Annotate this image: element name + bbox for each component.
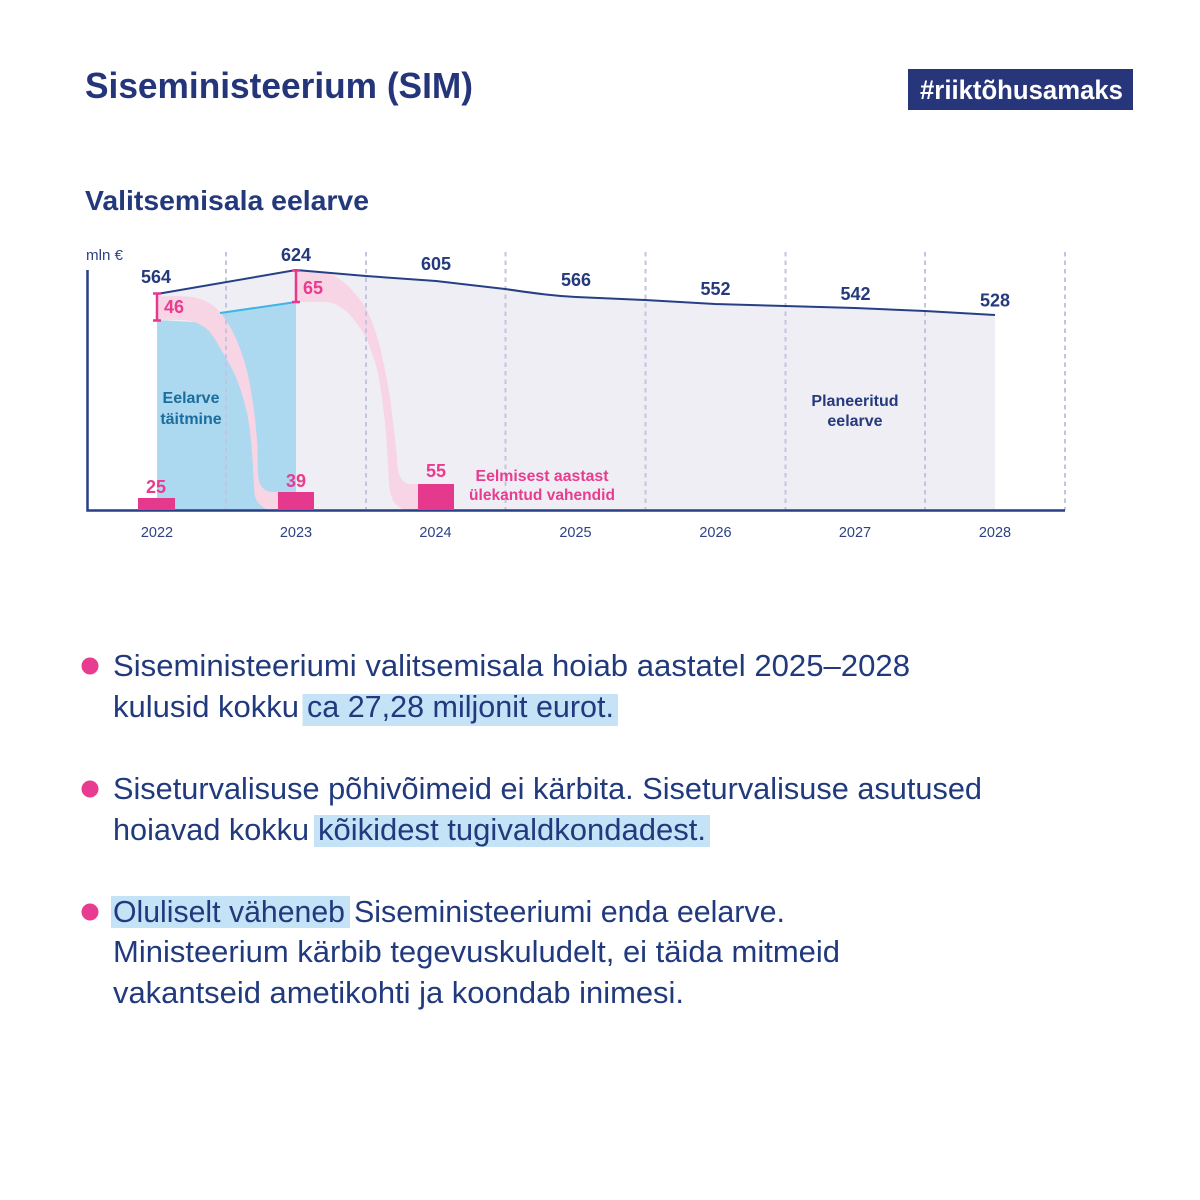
bullet point 1: ca 27,28 miljonit eurot.: [307, 689, 614, 724]
carried over values: 65: [303, 278, 323, 298]
bullet point 1: Siseministeeriumi valitsemisala hoiab aastatel 2025–2028: [113, 648, 910, 683]
carried over values: 46: [164, 297, 184, 317]
carried over values: [146, 278, 446, 497]
total values: 605: [421, 254, 451, 274]
range markers: [153, 270, 300, 320]
hashtag badge: [908, 69, 1133, 110]
axis unit: mln €: [86, 248, 123, 264]
total values: 552: [700, 279, 731, 299]
total values: 564: [141, 267, 171, 287]
total values: 566: [561, 270, 591, 290]
label: carried over funds: ülekantud vahendid: [469, 487, 615, 504]
carried over values: 25: [146, 477, 166, 497]
bullet point 2: [82, 771, 982, 847]
carried over bars: [138, 484, 454, 510]
total values: 528: [980, 290, 1010, 310]
label: carried over funds: Eelmisest aastast: [476, 468, 609, 485]
bullet point 3: [82, 894, 840, 1010]
bullet point 2: kõikidest tugivaldkondadest.: [318, 812, 706, 847]
bullet point 3: Oluliselt väheneb: [113, 894, 345, 929]
label: budget execution: [160, 390, 222, 428]
bullet point 2: Siseturvalisuse põhivõimeid ei kärbita. Siseturvalisuse asutused: [113, 771, 982, 806]
label: carried over funds: [469, 468, 615, 504]
year labels: 2027: [839, 525, 871, 541]
budget execution area: [157, 302, 296, 510]
bullet point 1: kulusid kokku: [113, 689, 299, 724]
total values: 624: [281, 245, 311, 265]
carried over band 2022: [157, 296, 278, 510]
total values: 542: [840, 284, 871, 304]
axes: [88, 270, 1065, 510]
execution line: [220, 302, 296, 313]
year labels: 2026: [699, 525, 732, 541]
label: budget execution: Eelarve: [163, 390, 220, 407]
hashtag badge: #riiktõhusamaks: [920, 75, 1123, 105]
bullet point 1: [82, 648, 910, 726]
title: Siseministeerium (SIM): [85, 65, 473, 106]
year labels: 2025: [559, 525, 592, 541]
chart: budget area chart: [86, 245, 1065, 541]
total values: [141, 245, 1010, 310]
dashed year separators: [226, 252, 1065, 510]
year labels: 2024: [419, 525, 452, 541]
chart heading: Valitsemisala eelarve: [85, 185, 369, 216]
bullet point 2: hoiavad kokku: [113, 812, 309, 847]
year labels: 2022: [141, 525, 173, 541]
carried over band 2023: [296, 271, 418, 510]
bullet point 3: Siseministeeriumi enda eelarve.: [354, 894, 785, 929]
bullet point 3: vakantseid ametikohti ja koondab inimesi.: [113, 975, 684, 1010]
label: planned budget: [811, 393, 899, 430]
label: budget execution: täitmine: [160, 411, 222, 428]
carried over values: 39: [286, 471, 306, 491]
carried over values: 55: [426, 461, 446, 481]
year labels: 2023: [280, 525, 312, 541]
label: planned budget: eelarve: [827, 413, 883, 430]
planned budget area: [157, 270, 995, 510]
label: planned budget: Planeeritud: [811, 393, 899, 410]
bullet point 3: Ministeerium kärbib tegevuskuludelt, ei täida mitmeid: [113, 934, 840, 969]
year labels: [141, 525, 1011, 541]
budget line: [157, 270, 995, 315]
year labels: 2028: [979, 525, 1011, 541]
